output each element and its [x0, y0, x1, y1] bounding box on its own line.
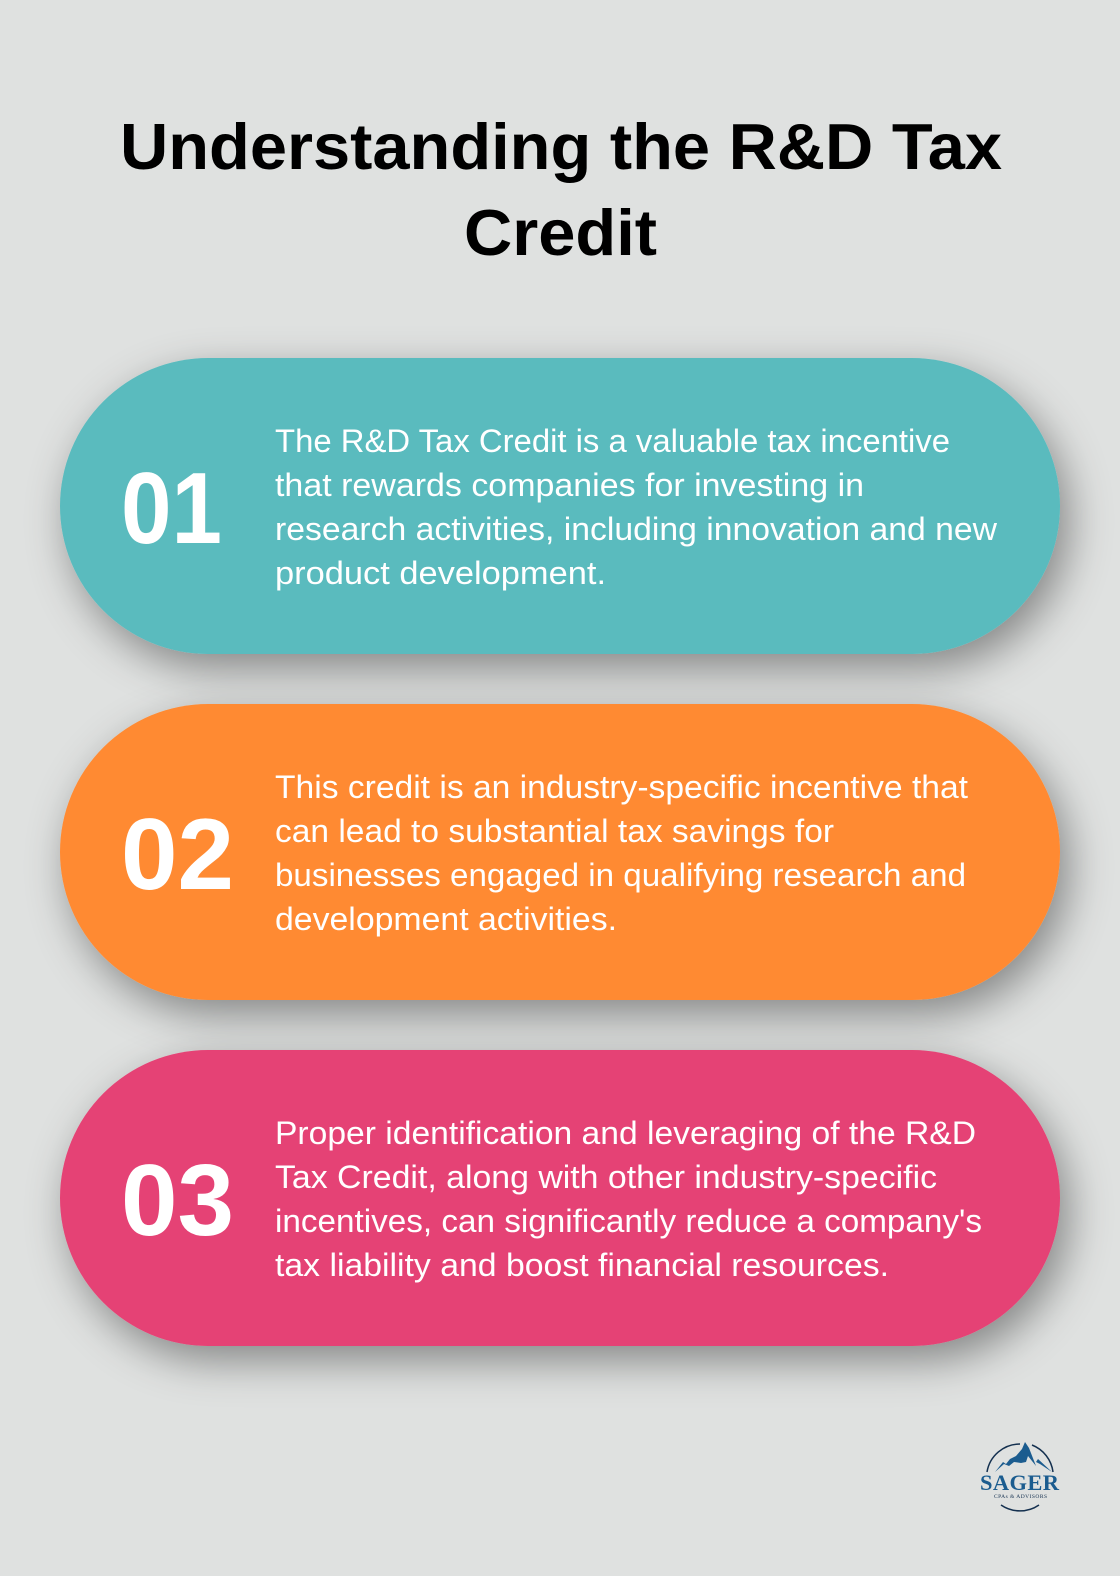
pink pill background	[60, 1050, 1060, 1346]
title: Understanding the R&D Tax	[120, 110, 1002, 183]
step 01 text: research activities, including innovation and new	[275, 511, 998, 547]
step 01 text: product development.	[275, 555, 606, 591]
icon: Sager logo	[980, 1442, 1060, 1511]
step 01 text	[275, 423, 998, 591]
number 01: 01	[121, 453, 222, 565]
logo wordmark: SAGER	[980, 1470, 1060, 1495]
step 03 text: tax liability and boost financial resources.	[275, 1247, 889, 1283]
panel: step 01	[60, 358, 1060, 654]
step 03 text: incentives, can significantly reduce a company's	[275, 1203, 982, 1239]
step 02 text: development activities.	[275, 901, 617, 937]
step 02 text: can lead to substantial tax savings for	[275, 813, 834, 849]
panel: step 03	[60, 1050, 1060, 1346]
step 01 text: The R&D Tax Credit is a valuable tax incentive	[275, 423, 950, 459]
step 03 text: Tax Credit, along with other industry-specific	[275, 1159, 937, 1195]
orange pill background	[60, 704, 1060, 1000]
teal pill background	[60, 358, 1060, 654]
step 03 text	[275, 1115, 982, 1283]
logo tagline: CPAs & ADVISORS	[994, 1494, 1047, 1500]
logo mountains	[995, 1442, 1052, 1472]
title: Credit	[464, 196, 657, 269]
number 02: 02	[121, 799, 234, 911]
step 02 text: businesses engaged in qualifying research and	[275, 857, 966, 893]
title	[120, 110, 1002, 269]
step 02 text	[275, 769, 968, 937]
step 03 text: Proper identification and leveraging of the R&D	[275, 1115, 976, 1151]
step 02 text: This credit is an industry-specific incentive that	[275, 769, 968, 805]
panel: step 02	[60, 704, 1060, 1000]
step 01 text: that rewards companies for investing in	[275, 467, 864, 503]
number 03: 03	[121, 1145, 234, 1257]
